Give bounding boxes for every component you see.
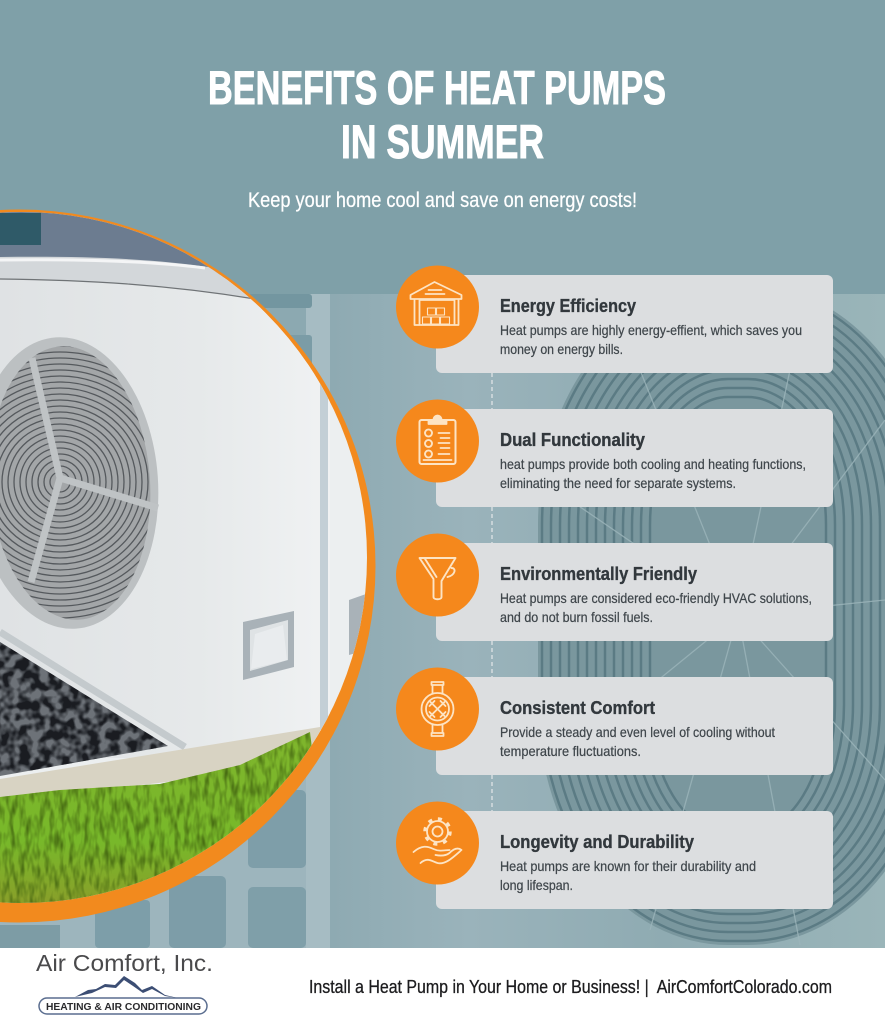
panel: longevity and durability: Heat pumps are known for their durability and [500,858,756,874]
photo handles [243,594,366,680]
panel: dual functionality: heat pumps provide both cooling and heating functions, [500,456,806,472]
photo curb [0,727,320,797]
dashed connector line [491,373,493,811]
icon: warehouse [410,282,462,325]
panel: environmentally friendly: Heat pumps are considered eco-friendly HVAC solutions, [500,590,812,606]
title [208,61,666,168]
panel: longevity and durability [396,802,833,909]
photo fan [0,337,159,629]
icon: gear and hand [414,819,462,863]
circular heat pump photo [0,200,390,920]
panel: consistent comfort: Consistent Comfort [500,698,655,718]
panel: environmentally friendly: and do not burn fossil fuels. [500,609,653,625]
icon: clipboard [420,416,456,464]
panel: dual functionality: Dual Functionality [500,430,645,450]
photo grass [0,732,312,903]
panel: environmentally friendly [396,534,833,641]
panel: energy efficiency: Energy Efficiency [500,296,636,316]
panel: longevity and durability: Longevity and Durability [500,832,694,852]
title: IN SUMMER [341,115,544,168]
top teal background [0,0,885,294]
logo: Air Comfort, Inc. [36,950,213,976]
panel: consistent comfort [396,668,833,775]
panel: dual functionality: eliminating the need for separate systems. [500,475,736,491]
panel: consistent comfort: temperature fluctuations. [500,743,641,759]
panel: dual functionality [396,400,833,507]
orange circle ring [0,210,376,922]
background fan grille [538,285,885,945]
icon: valve [422,682,454,736]
panel: energy efficiency: money on energy bills. [500,341,623,357]
logo: HEATING & AIR CONDITIONING [46,1001,201,1013]
panel: energy efficiency: Heat pumps are highly energy-effient, which saves you [500,322,802,338]
icon: funnel [420,558,456,599]
photo gravel [0,632,185,776]
panel: energy efficiency [396,266,833,373]
subtitle: Keep your home cool and save on energy costs! [248,189,637,212]
footer band [0,948,885,1024]
logo [36,950,213,1014]
photo lid [0,257,260,300]
panel: environmentally friendly: Environmentally Friendly [500,564,697,584]
panel: consistent comfort: Provide a steady and even level of cooling without [500,724,775,740]
title: BENEFITS OF HEAT PUMPS [208,61,666,114]
panel: longevity and durability: long lifespan. [500,877,573,893]
background photo: heat pump unit [0,285,885,948]
